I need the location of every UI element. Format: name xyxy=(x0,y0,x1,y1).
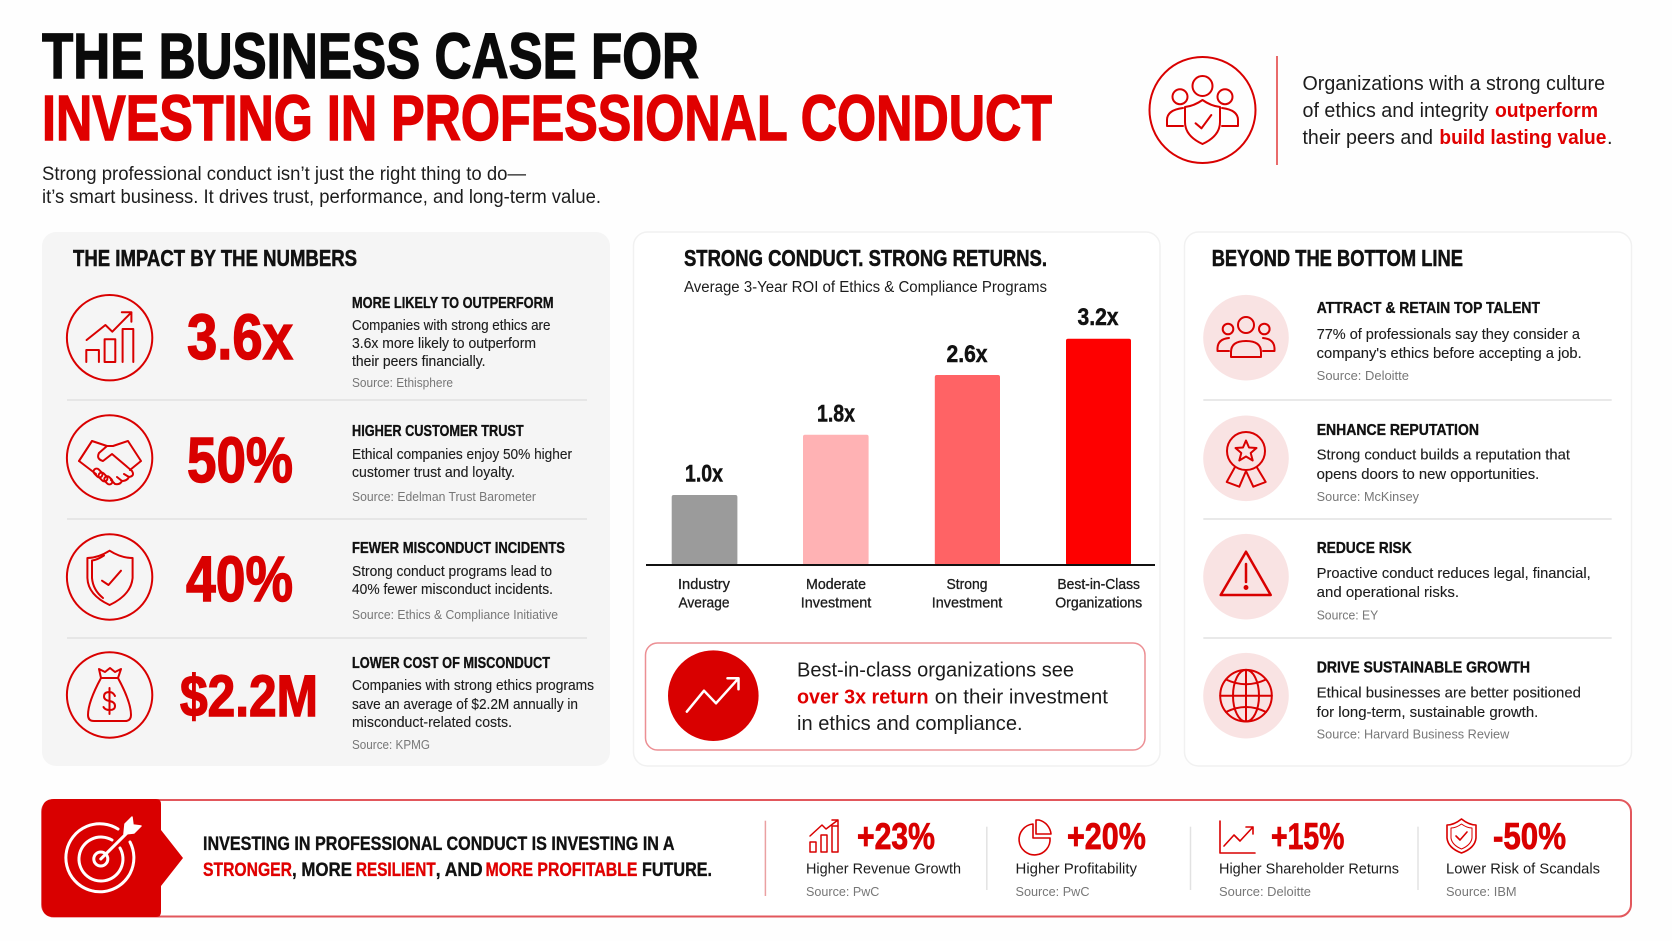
stat: 3.6x xyxy=(67,295,554,390)
stat: 50%: Source: Edelman Trust Barometer xyxy=(352,490,536,504)
bar chart: Best-in-Class xyxy=(1057,577,1140,593)
stat: 40%: FEWER MISCONDUCT INCIDENTS xyxy=(352,540,565,557)
heading: beyond: BEYOND THE BOTTOM LINE xyxy=(1212,245,1463,271)
stat: 50%: 50% xyxy=(187,424,293,496)
stat: 40%: Strong conduct programs lead to xyxy=(352,564,552,580)
callout: over 3x return: on their investment xyxy=(935,685,1108,708)
subtitle: Strong professional conduct isn’t just the right thing to do— xyxy=(42,163,526,185)
benefit: talent: company's ethics before accepting a job. xyxy=(1317,346,1582,362)
bar chart xyxy=(646,304,1155,612)
icon: money bag xyxy=(67,652,152,738)
header callout text: . xyxy=(1607,127,1613,149)
benefit: talent: ATTRACT & RETAIN TOP TALENT xyxy=(1317,300,1540,317)
stat: 50%: Ethical companies enjoy 50% higher xyxy=(352,447,572,463)
banner statement: INVESTING IN PROFESSIONAL CONDUCT IS INVESTING IN A xyxy=(203,834,675,855)
benefit: growth: Ethical businesses are better positioned xyxy=(1317,686,1581,702)
bar chart: Investment xyxy=(801,596,871,612)
stat: 3.6x: Companies with strong ethics are xyxy=(352,318,550,334)
banner statement xyxy=(203,834,712,881)
stat: 3.6x: 3.6x xyxy=(187,301,293,373)
icon: target on red tab xyxy=(42,799,183,917)
stat: shareholder returns: Source: Deloitte xyxy=(1219,885,1311,899)
stat: $2.2M: LOWER COST OF MISCONDUCT xyxy=(352,655,550,672)
bar chart: 2.6x xyxy=(946,341,988,368)
stat: shareholder returns: +15% xyxy=(1271,816,1344,857)
icon: warning triangle xyxy=(1203,534,1289,620)
stat: 40%: Source: Ethics & Compliance Initiative xyxy=(352,608,558,622)
bar chart: Industry xyxy=(678,577,731,593)
banner statement: MORE PROFITABLE xyxy=(486,860,638,881)
benefit: talent: Source: Deloitte xyxy=(1317,369,1409,383)
benefit: talent: 77% of professionals say they consider a xyxy=(1317,327,1581,343)
callout: over 3x return: Best-in-class organizations see xyxy=(797,659,1074,682)
stat: shareholder returns: Higher Shareholder Returns xyxy=(1219,860,1399,877)
stat: 50% xyxy=(67,415,572,504)
stat: 40%: 40% fewer misconduct incidents. xyxy=(352,582,553,598)
header callout text: build lasting value xyxy=(1439,127,1606,149)
benefit: talent xyxy=(1203,295,1582,383)
panel: the impact by the numbers xyxy=(42,232,610,766)
stat: 3.6x: Source: Ethisphere xyxy=(352,376,453,390)
bar chart: Organizations xyxy=(1055,596,1142,612)
stat: $2.2M: misconduct-related costs. xyxy=(352,715,512,731)
benefit: reputation: opens doors to new opportunities. xyxy=(1317,467,1539,483)
benefit: reputation: ENHANCE REPUTATION xyxy=(1317,422,1479,439)
bar chart: 1.0x xyxy=(685,461,724,488)
callout: over 3x return: over 3x return xyxy=(797,685,928,708)
stat: 3.6x: MORE LIKELY TO OUTPERFORM xyxy=(352,295,554,312)
icon: shield check xyxy=(67,534,152,620)
benefit: risk: Source: EY xyxy=(1317,608,1379,622)
heading: strong conduct: STRONG CONDUCT. STRONG RETURNS. xyxy=(684,245,1047,271)
icon: globe xyxy=(1203,653,1289,738)
stat: $2.2M: $2.2M xyxy=(180,664,318,729)
icon: growth chart xyxy=(67,295,152,380)
icon: shield xyxy=(1447,819,1476,853)
icon: line chart xyxy=(1220,821,1255,853)
stat: scandal risk: Lower Risk of Scandals xyxy=(1446,860,1600,877)
benefit: risk: Proactive conduct reduces legal, financial, xyxy=(1317,566,1591,582)
subtitle: it’s smart business. It drives trust, performance, and long-term value. xyxy=(42,186,601,208)
icon: award ribbon xyxy=(1203,416,1289,501)
callout: over 3x return xyxy=(646,643,1145,750)
stat: profitability: Source: PwC xyxy=(1016,885,1090,899)
chart subtitle: Average 3-Year ROI of Ethics & Compliance Programs xyxy=(684,279,1047,296)
icon: team with shield xyxy=(1150,57,1256,163)
benefit: growth xyxy=(1203,653,1581,742)
bar chart: 3.2x xyxy=(1078,304,1119,331)
benefit: growth: DRIVE SUSTAINABLE GROWTH xyxy=(1317,660,1530,676)
bar chart: 1.8x xyxy=(817,401,856,428)
stat: revenue growth xyxy=(806,816,961,899)
header callout text: their peers and xyxy=(1302,127,1433,149)
header callout text: Organizations with a strong culture xyxy=(1302,73,1605,95)
header callout text: outperform xyxy=(1495,100,1598,122)
benefit: risk: and operational risks. xyxy=(1317,585,1459,601)
icon: bars and arrow xyxy=(810,820,838,852)
bar chart: Average xyxy=(678,596,730,612)
benefit: growth: for long-term, sustainable growth. xyxy=(1317,705,1538,721)
banner statement: , AND xyxy=(436,860,483,881)
stat: scandal risk: -50% xyxy=(1493,816,1566,857)
benefit: risk xyxy=(1203,534,1591,622)
banner statement: FUTURE. xyxy=(642,860,712,881)
panel: beyond the bottom line xyxy=(1184,232,1632,766)
stat: revenue growth: Higher Revenue Growth xyxy=(806,860,961,877)
banner statement: STRONGER xyxy=(203,860,292,881)
header callout text xyxy=(1277,56,1613,165)
bar chart: Moderate xyxy=(806,577,866,593)
bar chart: Investment xyxy=(932,596,1002,612)
benefit: reputation xyxy=(1203,416,1570,504)
panel: strong conduct strong returns xyxy=(634,232,1160,766)
icon: trending arrow xyxy=(668,650,759,741)
bar chart: Strong xyxy=(946,577,988,593)
stat: 3.6x: their peers financially. xyxy=(352,354,486,370)
stat: 40% xyxy=(67,534,565,622)
icon: handshake xyxy=(67,415,152,501)
benefit: growth: Source: Harvard Business Review xyxy=(1317,728,1510,742)
stat: $2.2M: Companies with strong ethics programs xyxy=(352,678,594,694)
benefit: reputation: Source: McKinsey xyxy=(1317,490,1420,504)
callout: over 3x return: in ethics and compliance. xyxy=(797,712,1023,735)
stat: 3.6x: 3.6x more likely to outperform xyxy=(352,336,536,352)
stat: 40%: 40% xyxy=(186,543,293,615)
stat: scandal risk: Source: IBM xyxy=(1446,885,1517,899)
benefit: reputation: Strong conduct builds a reputation that xyxy=(1317,448,1570,464)
stat: revenue growth: +23% xyxy=(857,816,935,857)
icon: pie chart xyxy=(1019,820,1051,855)
bottom banner xyxy=(42,799,1631,917)
stat: profitability xyxy=(1016,816,1146,899)
stat: $2.2M: save an average of $2.2M annually in xyxy=(352,697,578,713)
stat: $2.2M xyxy=(67,652,594,752)
banner statement: RESILIENT xyxy=(356,860,436,881)
stat: profitability: Higher Profitability xyxy=(1016,860,1137,877)
stat: $2.2M: Source: KPMG xyxy=(352,738,430,752)
stat: 50%: customer trust and loyalty. xyxy=(352,465,515,481)
banner statement: , MORE xyxy=(292,860,352,881)
benefit: risk: REDUCE RISK xyxy=(1317,540,1412,557)
stat: scandal risk xyxy=(1446,816,1600,899)
subtitle xyxy=(42,163,601,208)
stat: shareholder returns xyxy=(1219,816,1399,899)
stat: profitability: +20% xyxy=(1067,816,1146,857)
stat: revenue growth: Source: PwC xyxy=(806,885,879,899)
icon: people xyxy=(1203,295,1289,381)
stat: 50%: HIGHER CUSTOMER TRUST xyxy=(352,423,524,440)
header callout text: of ethics and integrity xyxy=(1302,100,1488,122)
heading: impact: THE IMPACT BY THE NUMBERS xyxy=(73,245,357,271)
title: THE BUSINESS CASE FOR xyxy=(42,20,699,92)
title: INVESTING IN PROFESSIONAL CONDUCT xyxy=(42,82,1052,154)
title xyxy=(42,20,1052,154)
